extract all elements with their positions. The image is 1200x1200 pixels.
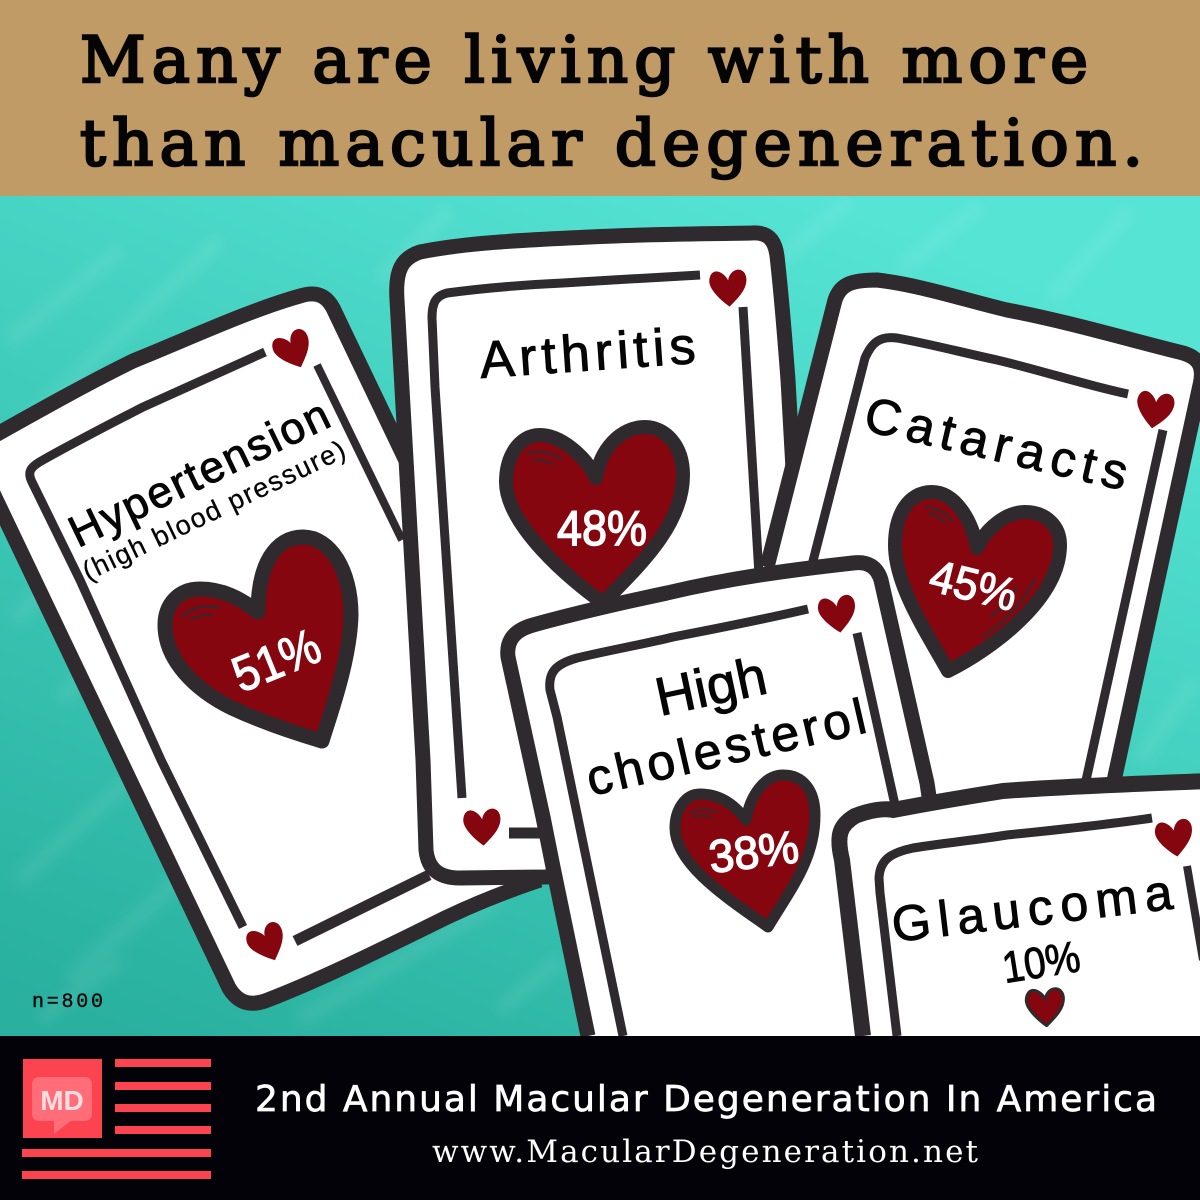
title: than macular degeneration.	[80, 107, 1143, 181]
footer bar	[0, 1036, 1200, 1200]
large heart 51%	[165, 537, 351, 741]
value 38%: 38%	[706, 820, 802, 883]
sample size note: n=800	[32, 991, 103, 1014]
label: high blood pressure: (high blood pressure)	[78, 434, 350, 586]
corner heart	[1132, 388, 1176, 432]
title: Many are living with more	[80, 24, 1088, 98]
corner heart	[817, 594, 857, 634]
card: cataracts 45%	[767, 280, 1200, 850]
label: cholesterol: cholesterol	[581, 688, 871, 807]
label: arthritis: Arthritis	[478, 317, 697, 390]
value 51%: 51%	[224, 618, 329, 703]
label: glaucoma: Glaucoma	[889, 864, 1176, 953]
card: arthritis 48%	[397, 233, 815, 878]
value 10%: 10%	[999, 932, 1084, 993]
corner heart	[269, 327, 317, 374]
value 48%: 48%	[557, 502, 647, 556]
corner heart	[1154, 818, 1194, 858]
corner heart	[463, 809, 500, 846]
corner heart	[243, 920, 291, 967]
value 45%: 45%	[925, 549, 1023, 621]
large heart 45%	[895, 492, 1060, 671]
card: high cholesterol 38%	[508, 563, 965, 1036]
large heart 48%	[506, 427, 683, 603]
footer title: 2nd Annual Macular Degeneration In America	[255, 1079, 1157, 1120]
title	[80, 24, 1143, 181]
small heart	[1026, 989, 1063, 1026]
logo: MD flag	[22, 1059, 211, 1179]
teal textured background	[0, 196, 1200, 1036]
label: hypertension: Hypertension	[61, 390, 337, 557]
label: cataracts: Cataracts	[860, 386, 1133, 501]
card: hypertension 51%	[0, 294, 540, 1003]
footer url: www.MacularDegeneration.net	[432, 1134, 979, 1170]
logo: MD flag: MD	[40, 1085, 84, 1116]
label: high: High	[650, 646, 772, 728]
large heart 38%	[675, 775, 815, 927]
card: glaucoma 10%	[839, 781, 1200, 1036]
corner heart	[709, 270, 746, 307]
header banner	[0, 0, 1200, 196]
